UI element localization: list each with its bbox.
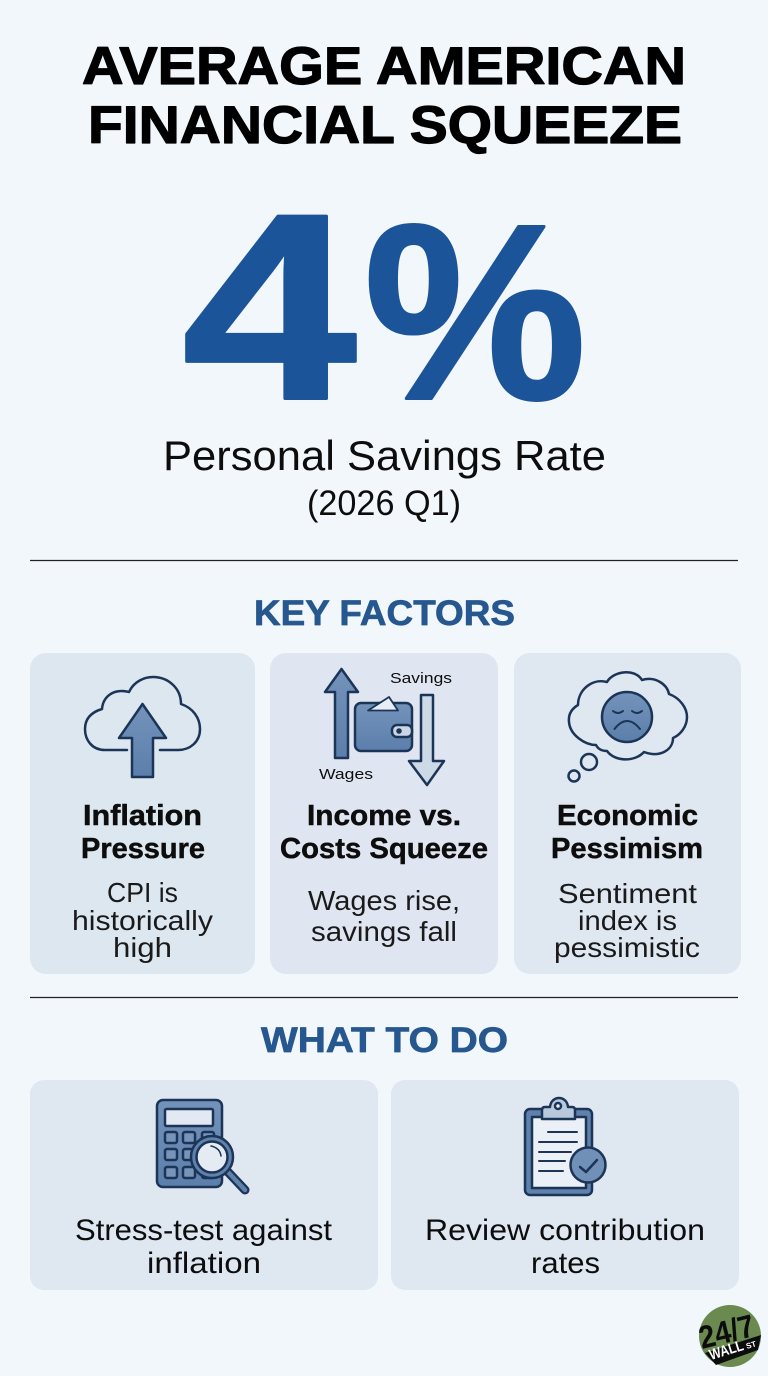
logo: 24/7 Wall St: 24/7 xyxy=(695,1307,758,1356)
card heading xyxy=(280,800,488,865)
card text: savings fall xyxy=(311,916,457,947)
title xyxy=(82,37,686,155)
icon: wallet with wages and savings arrows: Savings xyxy=(390,670,452,687)
icon: calculator with magnifier xyxy=(157,1100,245,1190)
card text: CPI is xyxy=(107,877,178,908)
card heading: Costs Squeeze xyxy=(280,833,488,865)
icon: clipboard with check xyxy=(525,1098,606,1195)
card heading: Income vs. xyxy=(307,800,461,832)
card text: index is xyxy=(578,905,677,936)
stat caption: Personal Savings Rate xyxy=(163,432,606,479)
panel: review contributions xyxy=(391,1080,739,1290)
card text: Sentiment xyxy=(558,878,697,909)
card text: Stress-test against xyxy=(75,1214,333,1247)
title: AVERAGE AMERICAN xyxy=(82,37,686,96)
heading: key factors: KEY FACTORS xyxy=(254,594,515,633)
big stat: 4%: 4 xyxy=(182,159,359,455)
icon: wallet with wages and savings arrows: Wages xyxy=(319,766,373,783)
card text xyxy=(75,1214,333,1280)
heading: what to do: WHAT TO DO xyxy=(261,1021,508,1060)
title: FINANCIAL SQUEEZE xyxy=(88,96,682,155)
card text xyxy=(554,878,700,963)
panel: economic pessimism xyxy=(514,653,741,974)
stat caption xyxy=(163,432,606,523)
stat caption: (2026 Q1) xyxy=(307,484,461,523)
card heading xyxy=(81,800,205,865)
card heading xyxy=(551,800,703,865)
icon: cloud with up arrow xyxy=(85,677,200,777)
card text: high xyxy=(113,932,172,963)
card text: Wages rise, xyxy=(308,885,460,916)
big stat: 4%: % xyxy=(364,172,586,452)
card heading: Pessimism xyxy=(551,833,703,865)
card text xyxy=(425,1214,705,1280)
icon: wallet with wages and savings arrows xyxy=(319,669,452,785)
card heading: Economic xyxy=(557,800,698,832)
panel: income vs costs xyxy=(270,653,498,974)
card text: historically xyxy=(72,905,213,936)
panel: stress-test xyxy=(30,1080,378,1290)
card text: inflation xyxy=(147,1247,261,1280)
logo: 24/7 Wall St: WALL xyxy=(707,1337,746,1364)
panel: inflation pressure xyxy=(30,653,255,974)
big stat: 4% xyxy=(182,159,586,455)
card heading: Pressure xyxy=(81,833,205,865)
card text: pessimistic xyxy=(554,932,700,963)
card text: rates xyxy=(531,1247,600,1280)
card text xyxy=(308,885,460,947)
card heading: Inflation xyxy=(83,800,202,832)
icon: thought bubble with sad face xyxy=(568,672,687,782)
logo: 24/7 Wall St: ST xyxy=(745,1339,757,1351)
card text xyxy=(72,877,213,963)
card text: Review contribution xyxy=(425,1214,705,1247)
